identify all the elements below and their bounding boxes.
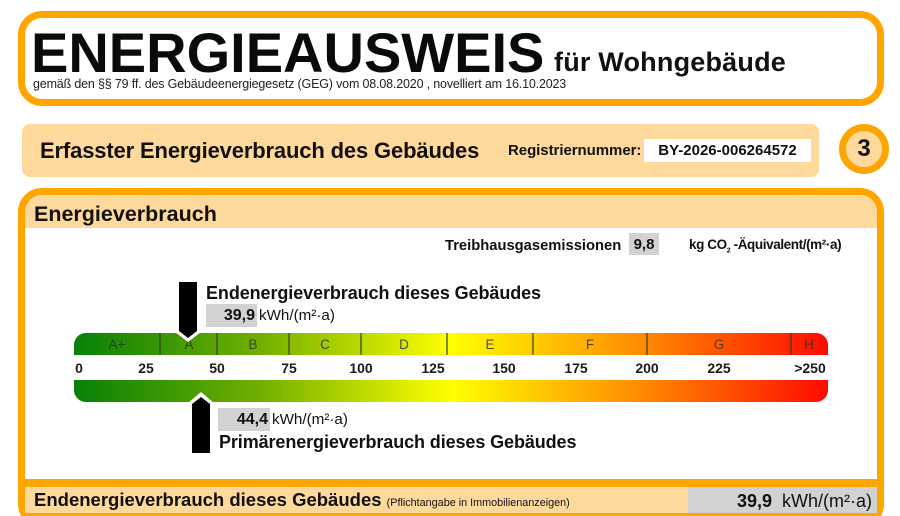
final energy unit: kWh/(m²·a): [259, 307, 335, 324]
scale numbers: 175: [564, 360, 588, 376]
summary value: 39,9 kWh/(m²·a): [737, 491, 872, 511]
emissions value: [629, 233, 659, 255]
final energy value: [206, 304, 335, 327]
page number badge: [839, 124, 889, 174]
energy class scale: H: [804, 337, 814, 352]
header panel: [18, 11, 884, 106]
primary energy scale: [74, 380, 828, 402]
registration label: Registriernummer:: [508, 142, 641, 159]
energy class scale: G: [714, 337, 724, 352]
scale numbers: 200: [635, 360, 659, 376]
emissions value: 9,8: [634, 236, 654, 253]
energy panel heading: Energieverbrauch: [34, 202, 217, 226]
energy class scale: A: [184, 337, 194, 352]
scale numbers: 0: [75, 360, 83, 376]
main title: ENERGIEAUSWEIS: [31, 21, 544, 84]
scale numbers: 150: [492, 360, 516, 376]
primary energy unit: kWh/(m²·a): [272, 411, 348, 428]
primary energy value: [218, 408, 348, 431]
primary energy number: [218, 408, 270, 431]
final energy arrow: [175, 282, 201, 342]
energy class scale: F: [586, 337, 594, 352]
section heading: Erfasster Energieverbrauch des Gebäudes: [40, 138, 479, 163]
energy class scale: A+: [109, 337, 126, 352]
emissions unit: kg CO2 -Äquivalent/(m²·a): [689, 237, 841, 255]
scale numbers: 100: [349, 360, 373, 376]
scale numbers: [75, 360, 826, 376]
legal reference line: gemäß den §§ 79 ff. des Gebäudeenergiegesetz (GEG) vom 08.08.2020 , novelliert am 16.10.2023: [33, 77, 566, 91]
energy class scale: C: [320, 337, 330, 352]
energy panel header: [25, 195, 877, 228]
subtitle: für Wohngebäude: [554, 47, 786, 77]
page number badge: 3: [857, 135, 871, 162]
final energy number: 39,9: [224, 307, 255, 324]
scale numbers: 125: [421, 360, 445, 376]
summary bar: [25, 479, 877, 516]
section band: [22, 124, 819, 177]
energy class scale: [74, 333, 828, 355]
summary row: [25, 487, 877, 513]
final energy label: Endenergieverbrauch dieses Gebäudes: [206, 283, 541, 303]
registration number: [644, 139, 811, 162]
summary label: Endenergieverbrauch dieses Gebäudes (Pflichtangabe in Immobilienanzeigen): [34, 489, 570, 510]
scale numbers: >250: [794, 360, 826, 376]
scale numbers: 25: [138, 360, 154, 376]
scale numbers: 75: [281, 360, 297, 376]
primary energy label: Primärenergieverbrauch dieses Gebäudes: [219, 432, 576, 452]
final energy number: [206, 304, 257, 327]
energy class scale: B: [248, 337, 258, 352]
scale numbers: 50: [209, 360, 225, 376]
primary energy number: 44,4: [237, 411, 268, 428]
registration number: BY-2026-006264572: [658, 142, 797, 159]
energy class scale: E: [485, 337, 495, 352]
emissions label: Treibhausgasemissionen: [445, 238, 621, 254]
greenhouse gas emissions: [445, 233, 841, 255]
energy panel: [18, 188, 884, 516]
summary value: [688, 487, 877, 513]
scale numbers: 225: [707, 360, 731, 376]
primary energy arrow: [188, 392, 214, 453]
energy class scale: D: [399, 337, 409, 352]
